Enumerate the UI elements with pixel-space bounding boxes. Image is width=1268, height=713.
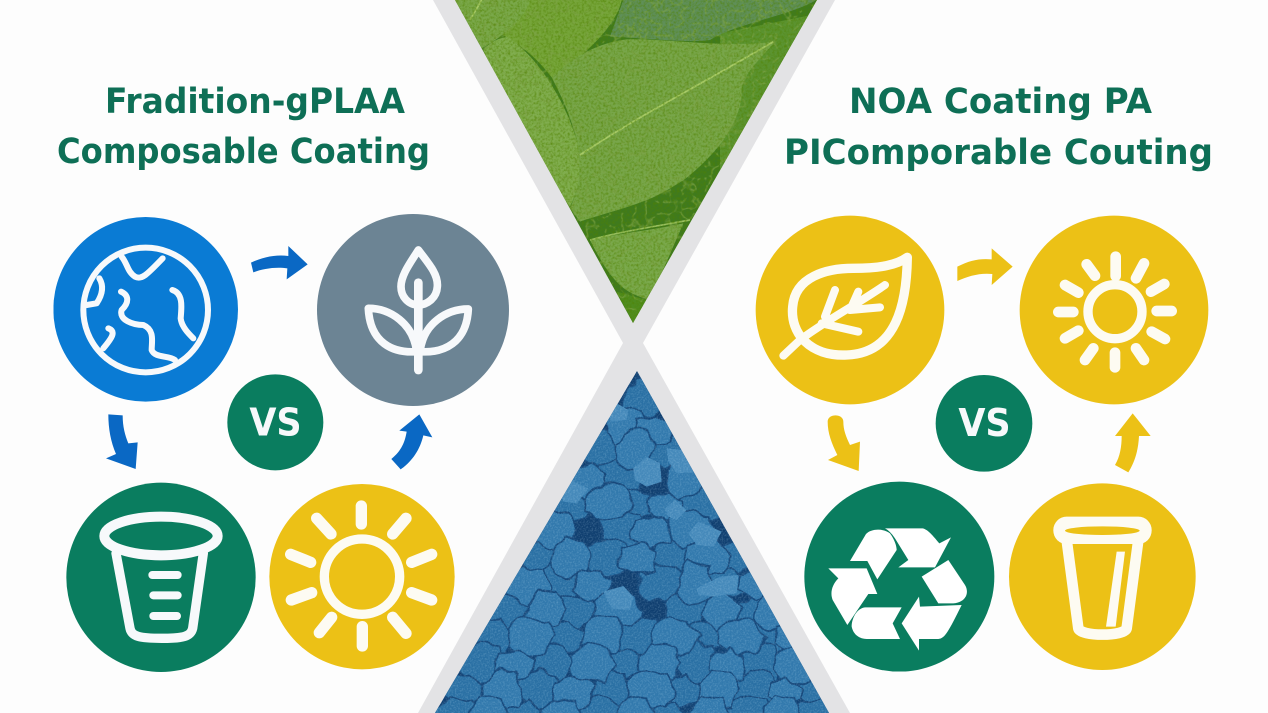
panel: left cycle [53,214,509,672]
arrow: blue right [251,246,308,279]
icon: sun [269,484,455,669]
heading: left [57,82,430,172]
arrow: blue down [106,414,138,469]
panel: right cycle [756,216,1208,672]
arrow: yellow down [828,415,860,471]
icon: recycling symbol [804,482,994,672]
heading: right [784,82,1213,173]
arrow: yellow up [1115,413,1151,472]
photo panel: blue pellets [435,371,829,713]
icon: globe [53,217,238,402]
photo panel: green leaves [455,0,817,323]
heading: right: NOA Coating PA [849,82,1152,122]
icon: sun [1020,216,1208,404]
VS badge: VS [958,401,1011,446]
icon: plant sprout [317,214,509,406]
heading: left: Fradition-gPLAA [105,82,405,122]
VS badge [936,375,1032,472]
heading: left: Composable Coating [57,132,430,172]
arrow: blue up [391,414,432,469]
icon: leaf [756,216,944,404]
icon: measuring cup [66,483,256,672]
VS badge: VS [249,401,302,446]
grey X frame [418,0,850,713]
icon: cup [1009,483,1196,670]
arrow: yellow right [957,248,1013,285]
heading: right: PIComporable Couting [784,133,1213,173]
VS badge [227,374,323,470]
